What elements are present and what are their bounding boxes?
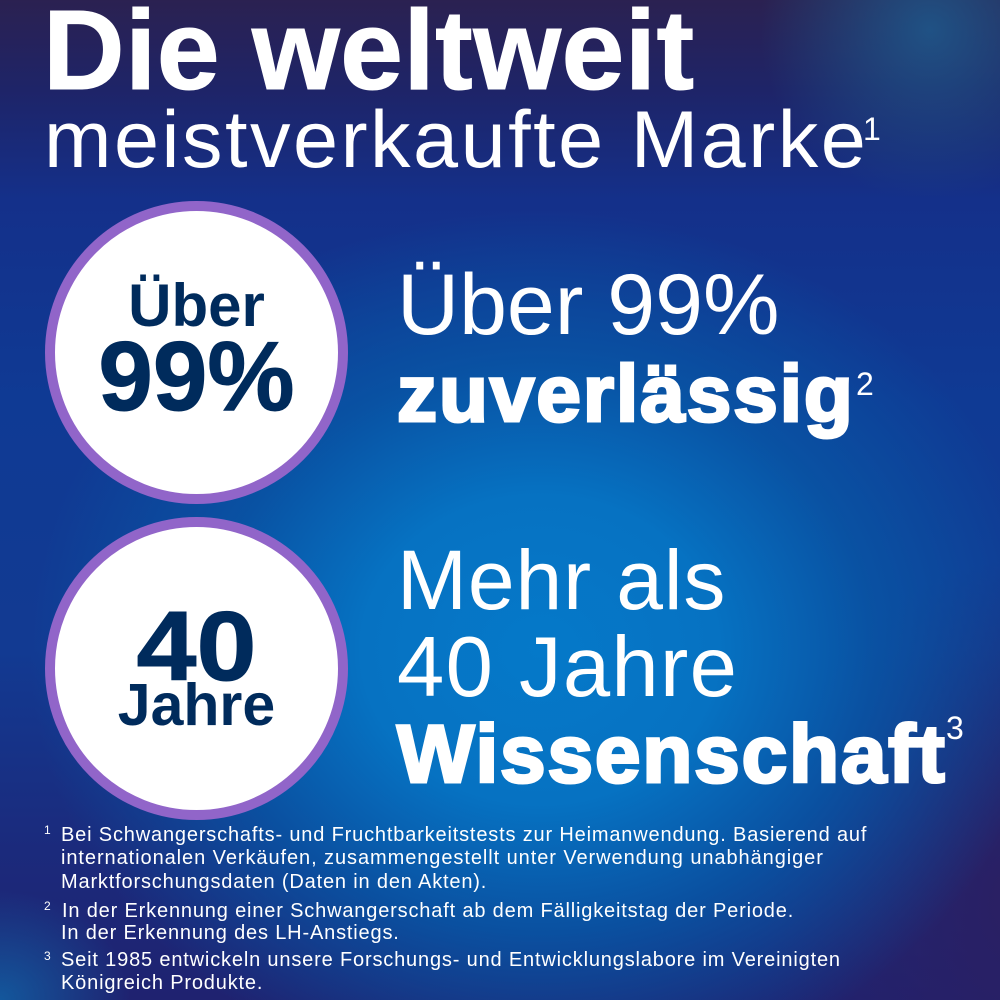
badge unit: Jahre (118, 672, 275, 738)
statement: reliability (397, 257, 874, 440)
footnote 1: internationalen Verkäufen, zusammengestellt unter Verwendung unabhängiger (61, 847, 824, 869)
badge text large: 99% (98, 321, 295, 431)
footnote 3: 3 (44, 949, 51, 963)
footnote 3 (44, 949, 841, 994)
title (43, 0, 881, 185)
footnote 1: 1 (44, 823, 51, 837)
footnote 1: Marktforschungsdaten (Daten in den Akten). (61, 871, 487, 893)
statement superscript: 3 (946, 710, 964, 746)
statement: science (395, 533, 964, 800)
footnote 3: Seit 1985 entwickeln unsere Forschungs- und Entwicklungslabore im Vereinigten (61, 949, 841, 971)
statement superscript: 2 (856, 366, 874, 402)
footnote 2 (44, 899, 794, 944)
badge number: 40 (137, 591, 256, 701)
statement line one: Mehr als (397, 533, 726, 627)
statement regular line: Über 99% (397, 257, 779, 353)
footnote 2: In der Erkennung einer Schwangerschaft ab dem Fälligkeitstag der Periode. (62, 900, 794, 922)
footnote 2: 2 (44, 899, 51, 913)
badge: 99% (45, 201, 348, 504)
footnote 1 (44, 823, 867, 893)
footnote 2: In der Erkennung des LH-Anstiegs. (61, 922, 400, 944)
badge text small: Über (128, 272, 265, 339)
footnotes (44, 823, 867, 994)
statement line two: 40 Jahre (397, 620, 738, 715)
title superscript: 1 (863, 111, 881, 147)
footnote 1: Bei Schwangerschafts- und Fruchtbarkeitstests zur Heimanwendung. Basierend auf (61, 824, 867, 846)
badge: 40 years (45, 517, 348, 820)
title regular line: meistverkaufte Marke (44, 95, 868, 185)
footnote 3: Königreich Produkte. (61, 972, 263, 994)
statement bold line: zuverlässig (397, 349, 855, 438)
statement bold line: Wissenschaft (397, 709, 946, 800)
